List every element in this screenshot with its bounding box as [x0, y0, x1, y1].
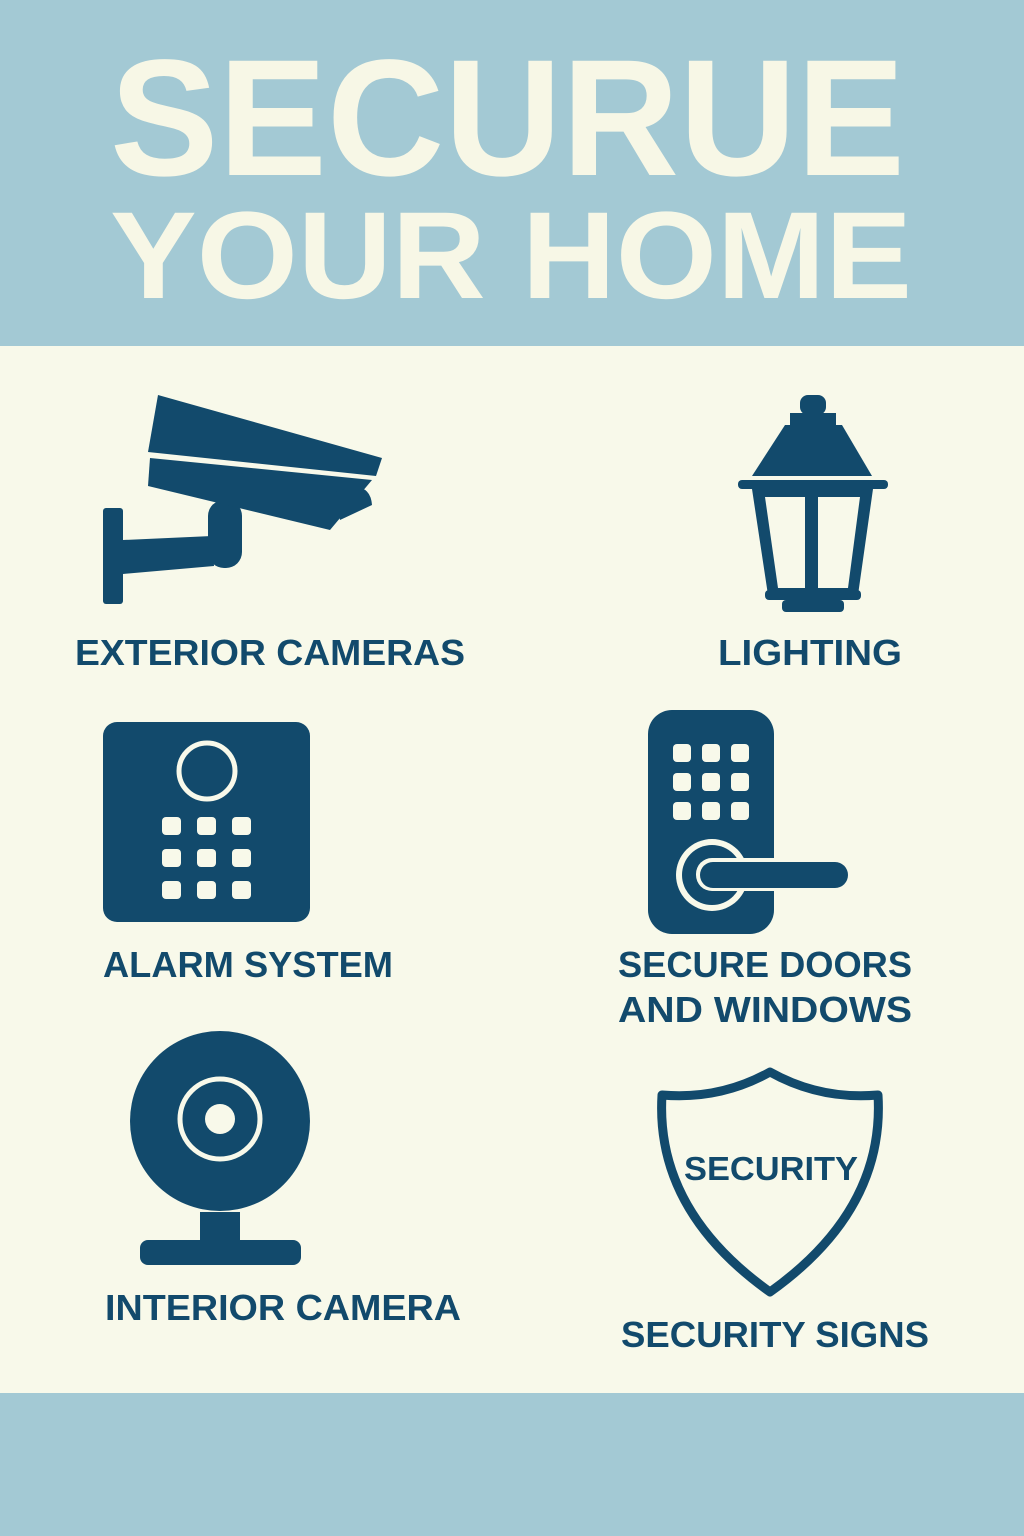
item: secure doors and windows: [618, 710, 912, 1030]
item: security signs: [621, 1072, 929, 1355]
icon: door lock: [648, 710, 851, 934]
icon: webcam: [130, 1031, 310, 1265]
item: lighting: LIGHTING: [718, 632, 902, 673]
item: security signs: SECURITY SIGNS: [621, 1314, 929, 1355]
item: alarm system: [103, 722, 393, 985]
icon: cctv camera: [103, 395, 382, 604]
item: alarm system: ALARM SYSTEM: [103, 944, 393, 985]
item: lighting: [718, 395, 902, 673]
item: interior camera: INTERIOR CAMERA: [105, 1287, 461, 1328]
header band: [0, 0, 1024, 346]
item: exterior cameras: [75, 395, 465, 673]
item: secure doors and windows: SECURE DOORS: [618, 944, 912, 985]
footer band: [0, 1393, 1024, 1536]
item: exterior cameras: EXTERIOR CAMERAS: [75, 632, 465, 673]
title: YOUR HOME: [110, 187, 912, 325]
icon: shield: SECURITY: [684, 1150, 858, 1187]
item: secure doors and windows: AND WINDOWS: [618, 989, 912, 1030]
title: [110, 26, 912, 325]
item: interior camera: [105, 1031, 461, 1328]
title: SECURUE: [110, 26, 905, 211]
icon: keypad: [103, 722, 310, 922]
icon: shield: [662, 1072, 878, 1292]
icon: lantern: [738, 395, 888, 612]
